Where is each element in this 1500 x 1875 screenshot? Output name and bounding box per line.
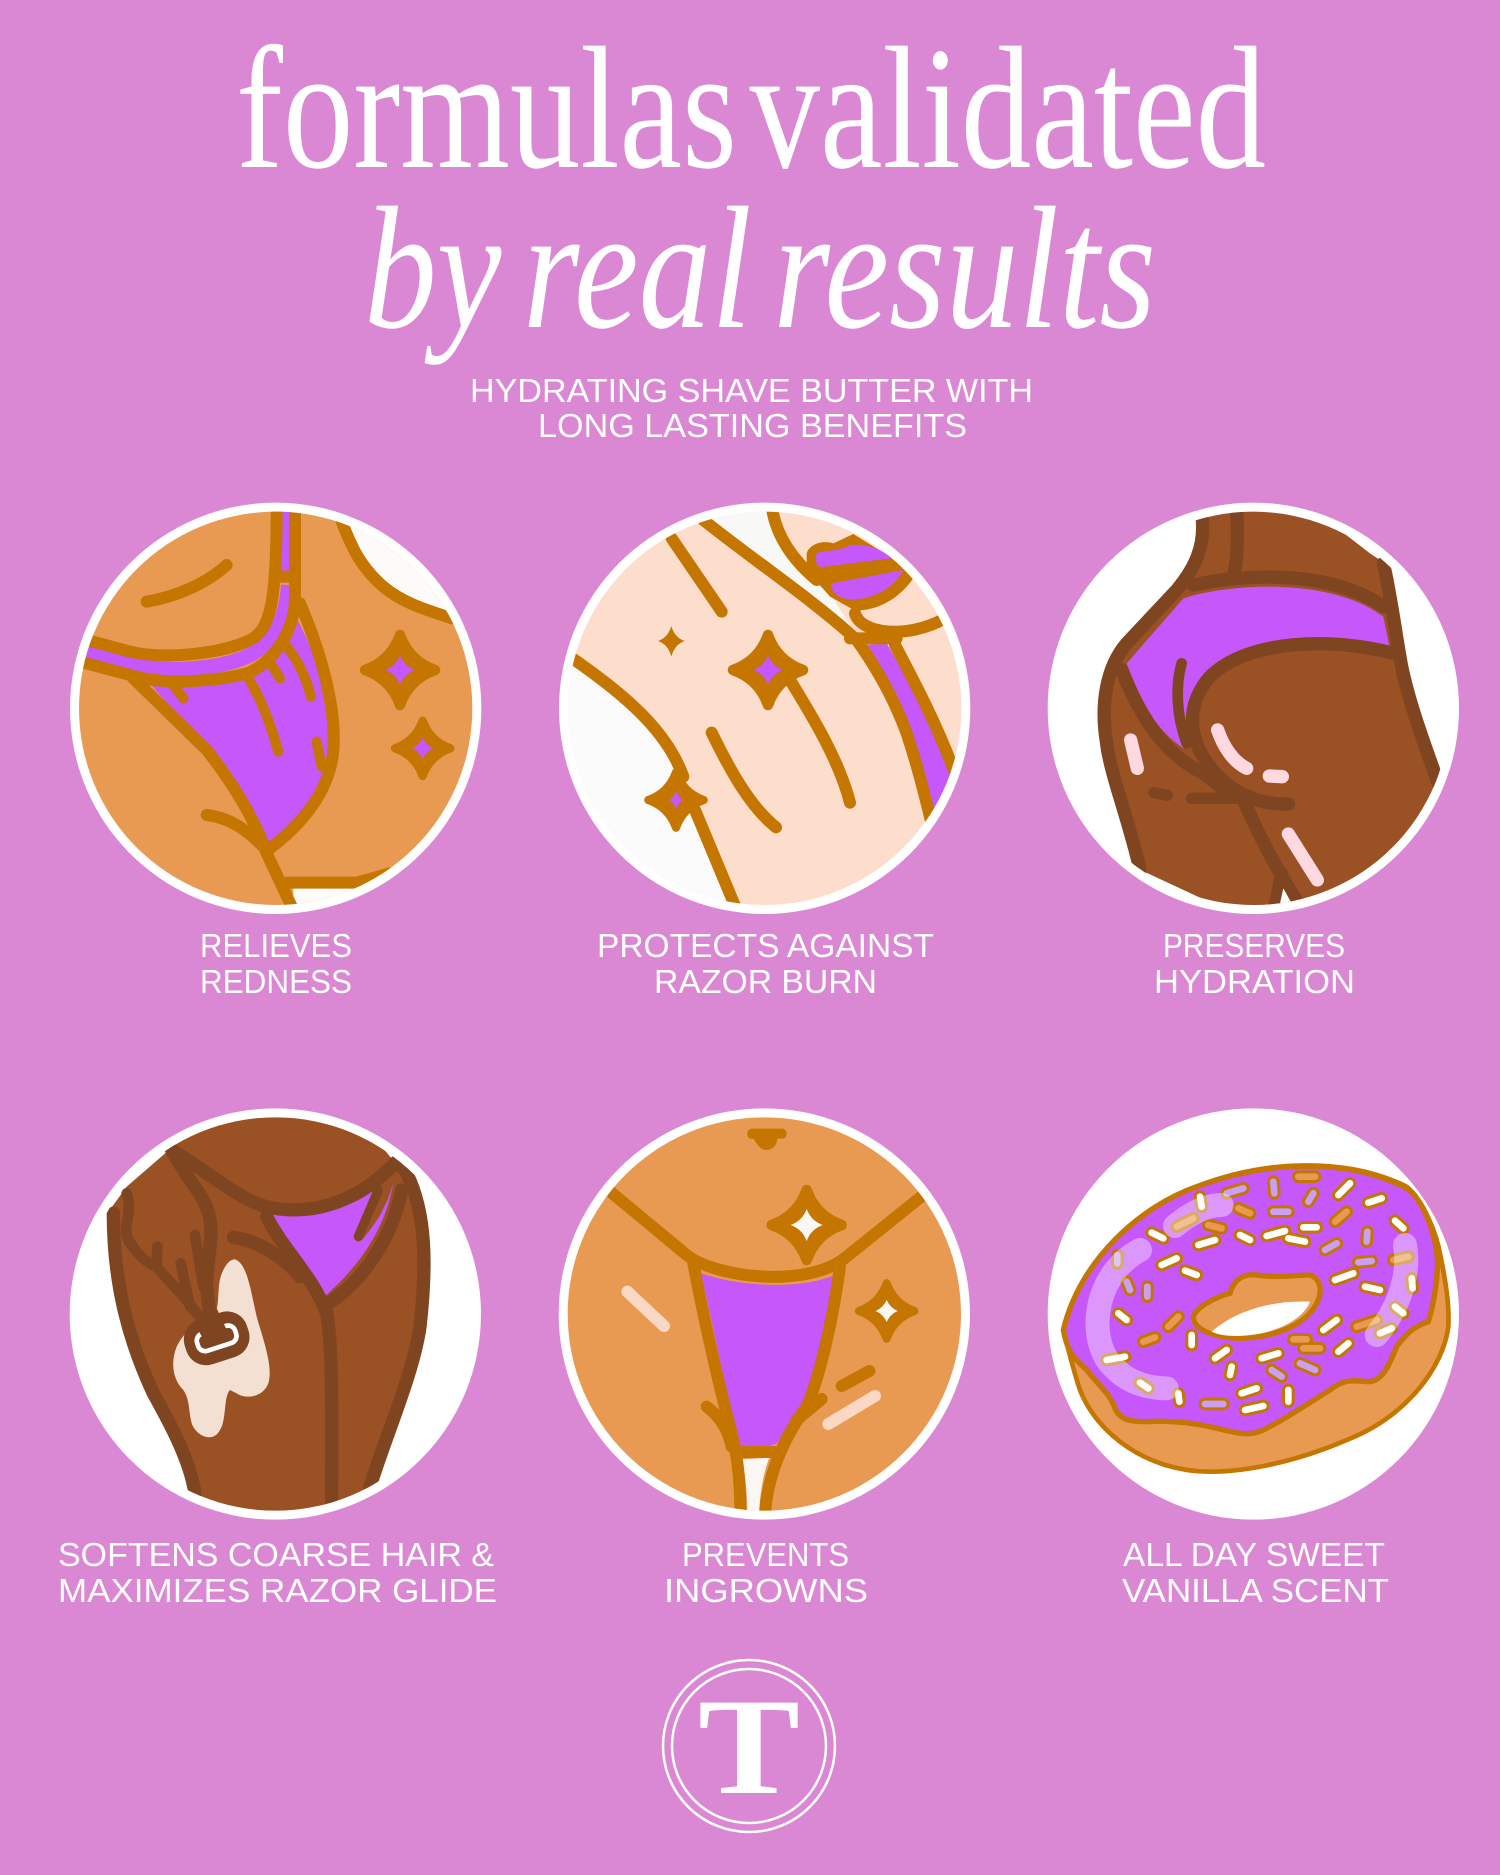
logo: T monogram in double ring: T xyxy=(698,1670,800,1823)
frosting highlights xyxy=(1097,1205,1406,1388)
icon: front bikini line with sparkles xyxy=(558,1108,970,1520)
title: by real results xyxy=(364,171,1156,365)
label: REDNESS xyxy=(200,963,352,1000)
label xyxy=(200,927,352,1000)
label xyxy=(1122,1536,1389,1609)
label: RAZOR BURN xyxy=(654,963,877,1000)
label: MAXIMIZES RAZOR GLIDE xyxy=(58,1572,497,1609)
label: VANILLA SCENT xyxy=(1122,1572,1389,1609)
subtitle: HYDRATING SHAVE BUTTER WITH xyxy=(470,372,1033,409)
label: INGROWNS xyxy=(664,1572,868,1609)
panel: preserves hydration xyxy=(1048,497,1463,1000)
label xyxy=(597,927,934,1000)
label: SOFTENS COARSE HAIR & xyxy=(58,1536,494,1573)
label: RELIEVES xyxy=(200,927,352,964)
icon: hand shaving dark skin with razor and cream xyxy=(70,1107,481,1533)
label xyxy=(58,1536,497,1609)
icon: pale leg with sparkles xyxy=(559,502,970,914)
subtitle: LONG LASTING BENEFITS xyxy=(538,407,967,444)
panel: relieves redness xyxy=(70,502,482,994)
label xyxy=(664,1536,868,1609)
panel: protects against razor burn xyxy=(559,502,970,994)
label: PREVENTS xyxy=(682,1536,849,1573)
panel: all day sweet vanilla scent xyxy=(1048,1108,1459,1609)
title xyxy=(236,11,1266,365)
panel: prevents ingrowns xyxy=(558,1108,970,1602)
logo: T monogram in double ring xyxy=(663,1660,835,1832)
icon: purple frosted donut with sprinkles xyxy=(1048,1108,1459,1520)
label: PRESERVES xyxy=(1163,927,1345,964)
label: PROTECTS AGAINST xyxy=(597,927,934,964)
icon: bikini with sparkles, light skin xyxy=(70,502,482,914)
label xyxy=(1154,927,1355,1000)
sprinkles xyxy=(1107,1177,1413,1410)
title: formulas validated xyxy=(236,11,1266,205)
subtitle xyxy=(470,372,1033,444)
label: ALL DAY SWEET xyxy=(1123,1536,1385,1573)
icon: dark skin back view with bikini xyxy=(1048,497,1463,933)
panel: softens coarse hair and razor glide xyxy=(58,1107,497,1609)
label: HYDRATION xyxy=(1154,963,1355,1000)
